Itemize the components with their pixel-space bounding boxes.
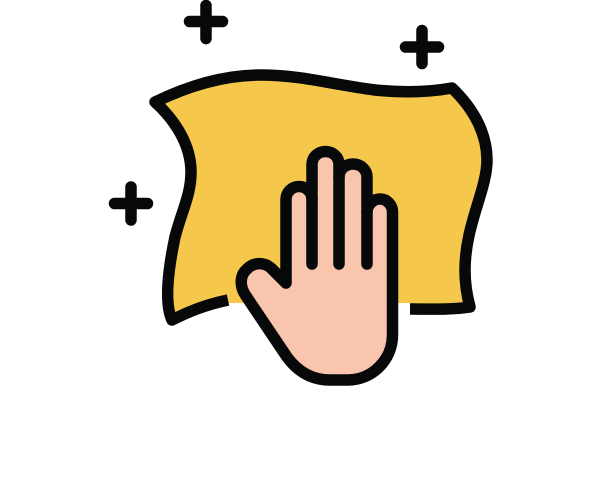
hand palm and fingers: [241, 152, 392, 380]
finger separators: [312, 177, 367, 264]
icon: sparkle left: [114, 187, 148, 220]
cloth fill: [155, 75, 487, 320]
cloth: [155, 75, 487, 320]
icon: sparkle top right: [406, 30, 438, 64]
icon: sparkle top left: [190, 6, 222, 38]
cloth outline left and top: [155, 75, 487, 320]
hand: [241, 152, 392, 380]
